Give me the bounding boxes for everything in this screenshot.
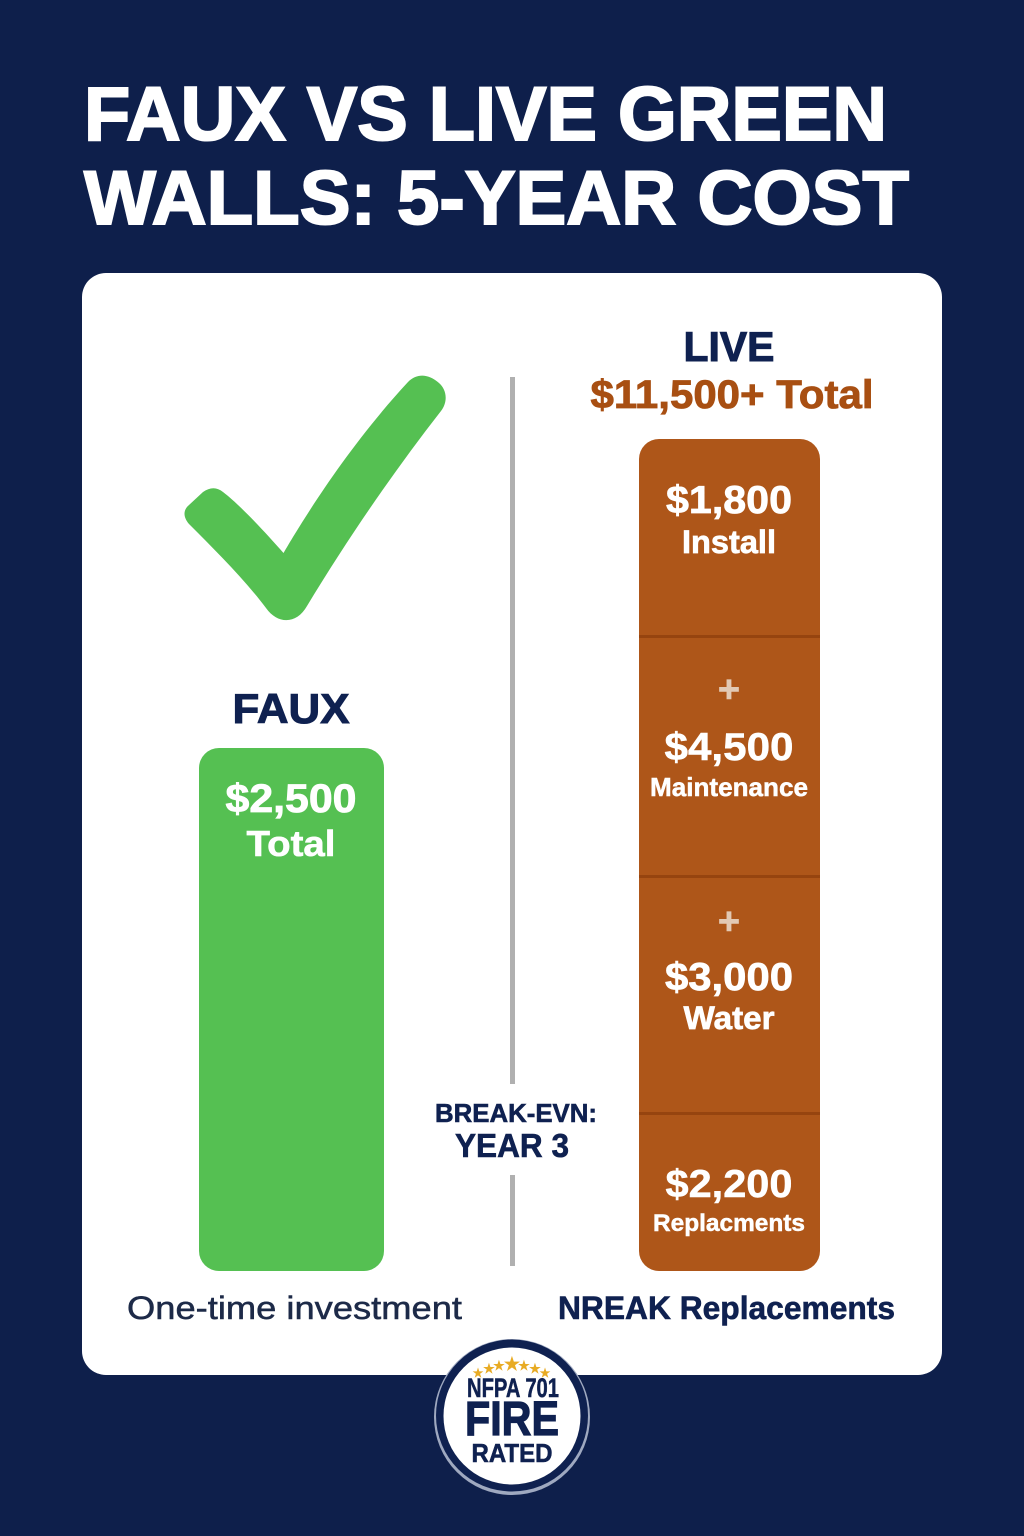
divider: upper bbox=[510, 377, 515, 1084]
badge: NFPA 701 fire rated bbox=[434, 1339, 590, 1495]
badge stars: ★ bbox=[540, 1366, 551, 1380]
badge stars: ★ bbox=[483, 1361, 495, 1376]
badge stars: ★ bbox=[518, 1358, 530, 1373]
badge text bbox=[465, 1373, 559, 1468]
badge stars: ★ bbox=[529, 1361, 541, 1376]
segment: install: Install bbox=[682, 524, 776, 560]
segment: maintenance bbox=[650, 726, 808, 802]
segment: maintenance: Maintenance bbox=[650, 772, 808, 802]
segment: water: $3,000 bbox=[665, 956, 793, 999]
heading: live: LIVE bbox=[684, 323, 774, 370]
segment: replacements bbox=[653, 1163, 805, 1237]
segment: water bbox=[665, 956, 793, 1036]
icon: green check mark bbox=[184, 376, 446, 620]
badge stars: ★ bbox=[504, 1354, 521, 1374]
badge stars: ★ bbox=[493, 1358, 505, 1373]
faux label: Total bbox=[246, 823, 336, 864]
caption: one-time investment: One-time investment bbox=[127, 1290, 462, 1326]
title bbox=[84, 72, 909, 241]
caption: nreak replacements: NREAK Replacements bbox=[558, 1290, 895, 1326]
badge text: RATED bbox=[472, 1438, 552, 1468]
title: WALLS: 5-YEAR COST bbox=[84, 156, 909, 241]
segment: install: $1,800 bbox=[666, 479, 792, 522]
segment: maintenance: $4,500 bbox=[664, 726, 794, 769]
badge stars: ★ bbox=[473, 1366, 484, 1380]
heading: faux: FAUX bbox=[232, 685, 350, 732]
bar: faux total bbox=[199, 748, 384, 1271]
title: FAUX VS LIVE GREEN bbox=[84, 72, 887, 157]
callout: break-even: YEAR 3 bbox=[455, 1127, 569, 1164]
segment: replacements: Replacments bbox=[653, 1210, 805, 1237]
plus sign: + bbox=[718, 901, 740, 943]
badge stars bbox=[473, 1354, 551, 1380]
badge text: NFPA 701 bbox=[467, 1373, 559, 1403]
divider: lower bbox=[510, 1175, 515, 1266]
callout: break-even bbox=[435, 1098, 597, 1164]
segment: replacements: $2,200 bbox=[666, 1163, 792, 1206]
callout: break-even: BREAK-EVN: bbox=[435, 1098, 597, 1128]
live total: $11,500+ Total bbox=[590, 373, 874, 417]
plus sign: + bbox=[718, 669, 740, 711]
badge text: FIRE bbox=[465, 1393, 559, 1446]
panel: comparison card bbox=[82, 273, 942, 1375]
bar: live stacked cost bbox=[639, 439, 820, 1271]
faux value: $2,500 bbox=[226, 777, 356, 821]
segment: water: Water bbox=[684, 1000, 774, 1036]
segment: install bbox=[666, 479, 792, 560]
